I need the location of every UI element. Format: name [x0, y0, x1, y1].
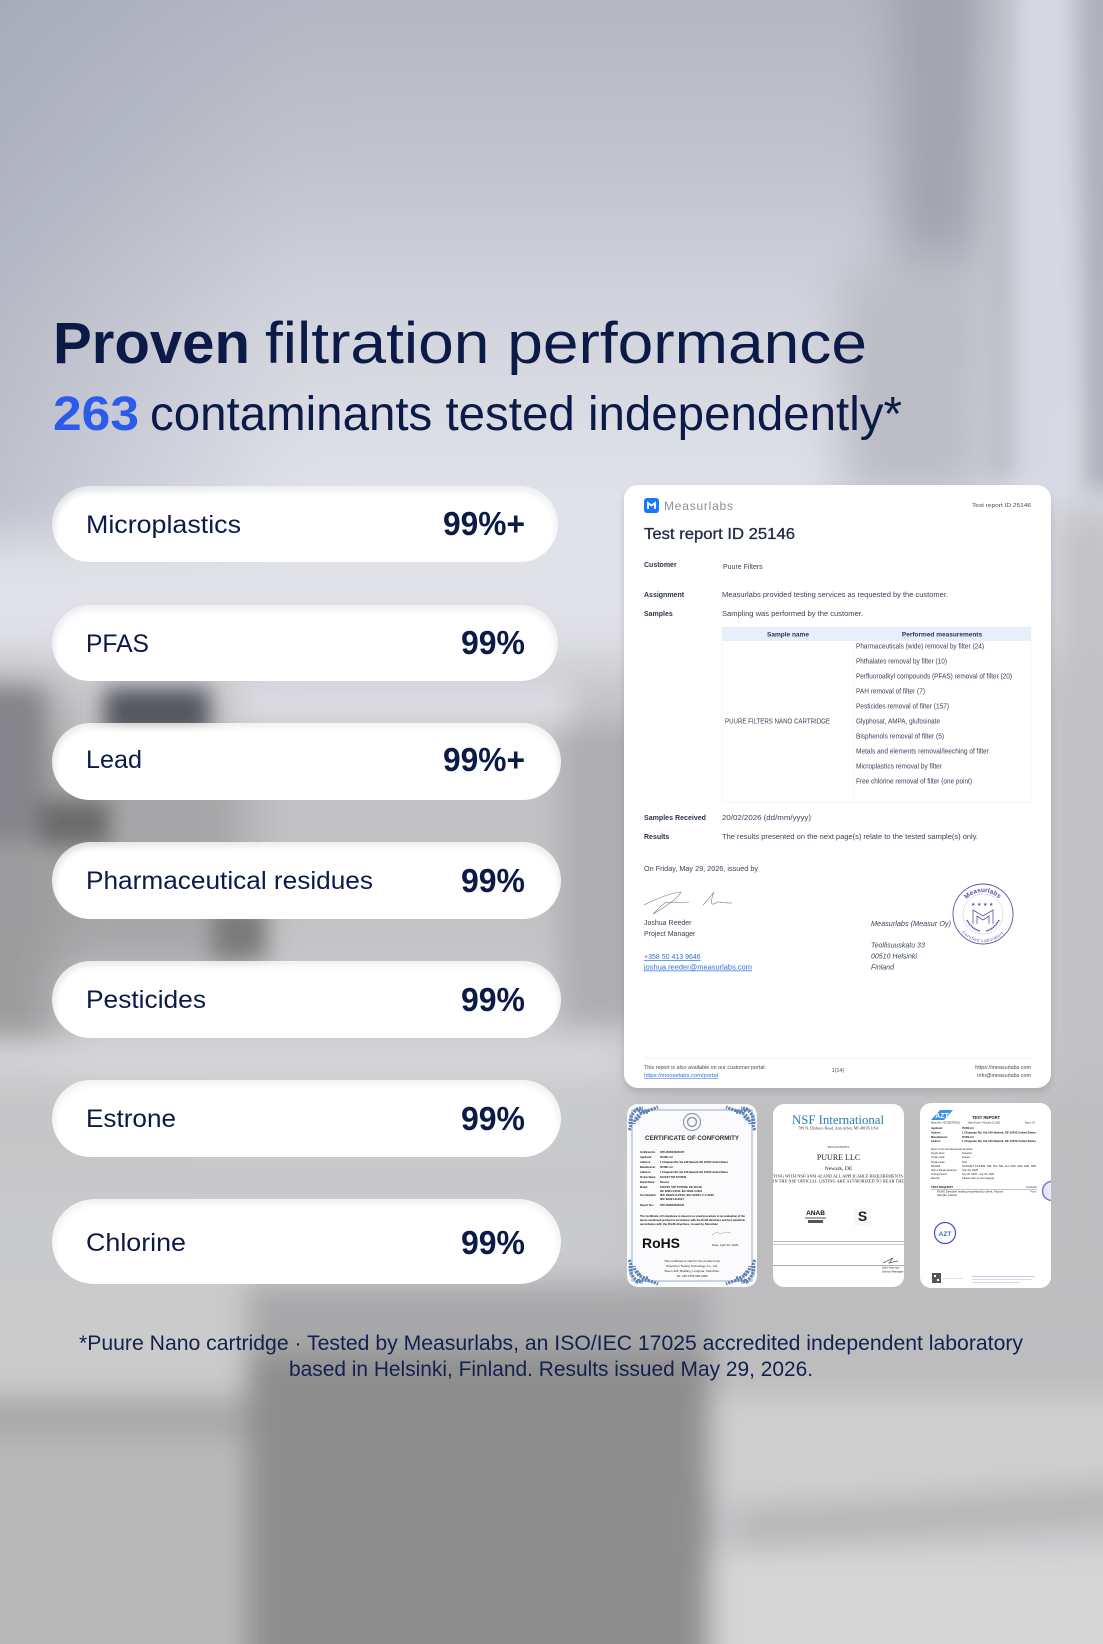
certificate text: Date: April 10, 2026	[712, 1243, 739, 1247]
report text: Date of Issue: February 03, 2025	[968, 1122, 1001, 1124]
certificate text: Room 305, Building, Longhua, Shenzhen	[665, 1269, 720, 1273]
certificate text: Model:	[640, 1185, 648, 1189]
company address: Teollisuuskatu 33	[871, 942, 925, 950]
report fields: Sampling was performed by the customer.	[722, 611, 863, 618]
icon: lab stamp	[952, 884, 1014, 944]
report fields	[644, 562, 948, 618]
signature	[644, 892, 732, 914]
report footer	[644, 1058, 1032, 1079]
pill: PFAS: PFAS	[86, 630, 149, 658]
certificate text: IEC 62321-8:2017	[660, 1197, 684, 1201]
icon: seal	[684, 1114, 700, 1130]
certificate text: Newark, DE	[825, 1166, 853, 1172]
pill: Microplastics: Microplastics	[86, 511, 241, 539]
certificate text: SPC.20260448AV78	[660, 1203, 684, 1207]
pill: Lead	[52, 723, 561, 800]
pill: Pesticides: 99%	[461, 981, 525, 1018]
report text: N/A	[962, 1160, 967, 1164]
report text: PUURE LLC	[962, 1135, 975, 1139]
samples table: Metals and elements removal/leeching of filter	[856, 748, 990, 756]
report text: Please refer to next page(s)	[962, 1176, 994, 1180]
company address	[871, 921, 951, 972]
pill: Lead: Lead	[86, 746, 142, 774]
corner ornaments	[629, 1107, 755, 1284]
pill: Estrone	[52, 1080, 561, 1157]
samples table: Performed measurements	[902, 632, 982, 638]
certificate text: 789 N. Dixboro Road, Ann Arbor, MI 48105 USA	[798, 1126, 879, 1132]
signatory contact: joshua.reeder@measurlabs.com	[643, 964, 752, 972]
icon: lab stamp: Certified Laboratory	[962, 931, 1004, 942]
report text: 1 Chapman Rd, Ste 240 Newark, DE 19702 United States	[962, 1130, 1036, 1134]
report footer: https://measurlabs.com	[975, 1065, 1032, 1071]
report text: Serial model:	[931, 1160, 945, 1164]
report fields: Assignment	[644, 592, 685, 599]
report text: Puure	[962, 1155, 970, 1159]
certificate text: Test Standard:	[640, 1193, 656, 1197]
samples table: Microplastics removal by filter	[856, 764, 943, 770]
pill: PFAS: 99%	[461, 624, 525, 661]
samples table: Glyphosat, AMPA, glufosinate	[856, 718, 940, 726]
signatory contact: Joshua Reeder	[644, 920, 692, 927]
certificate text: Tel: +86 0755 000 0000	[676, 1274, 708, 1278]
samples table	[722, 627, 1031, 802]
report text: July 29, 2025	[962, 1168, 978, 1172]
report text: Applicant:	[931, 1126, 943, 1130]
certificate text: above mentioned product in accordance with the RoHS directives and test standards	[640, 1218, 745, 1222]
samples table: Phthalates removal by filter (10)	[856, 658, 947, 666]
certificate text: YING WITH NSF/ANSI 42 AND ALL APPLICABLE REQUIREMENTS.	[773, 1174, 904, 1178]
samples table: Bisphenols removal of filter (5)	[856, 734, 944, 740]
certificate text: Certificate No.:	[640, 1150, 656, 1154]
certificate text: This certificate is valid for the product only	[664, 1259, 720, 1263]
report text: Testing Period:	[931, 1172, 947, 1176]
company address: Measurlabs (Measur Oy)	[871, 921, 951, 928]
samples table: Perfluoroalkyl compounds (PFAS) removal of filter (20)	[856, 674, 1012, 680]
report text: Report on the submitted sample as follows:	[931, 1147, 973, 1151]
icon: AZT logo: AZT	[935, 1113, 950, 1120]
fine print and signature: Kyle Norman	[882, 1266, 900, 1270]
pill: Estrone: 99%	[461, 1100, 525, 1137]
report text: 1 Chapman Rd, Ste 240 Newark, DE 19702 United States	[962, 1139, 1036, 1143]
report text: TEST REQUEST	[931, 1185, 953, 1189]
report text: Conclusion	[1026, 1185, 1037, 1189]
certificate text: IEC 62321-6:2015, IEC 62321-7-1:2015	[660, 1193, 714, 1197]
report text: Results:	[931, 1176, 940, 1180]
panel: test report document	[622, 485, 1054, 1094]
certificate text: The Certificate of Compliance is based on a small procedure to an evaluation of the	[640, 1214, 745, 1218]
title	[53, 311, 867, 376]
report footer: 1(14)	[832, 1068, 844, 1074]
certificate text: Brand Name:	[640, 1180, 655, 1184]
pill: Pharmaceutical residues	[52, 842, 561, 919]
pill: Pesticides	[52, 961, 561, 1038]
report text: Address:	[931, 1130, 941, 1134]
certificate text: IEC 62321-4:2013, IEC 62321-5:2013	[660, 1189, 702, 1193]
report footer: info@measurlabs.com	[977, 1073, 1031, 1079]
certificate text: Product Name:	[640, 1175, 656, 1179]
report text: Report No.: AZT250227BV201	[931, 1122, 961, 1124]
certificate text: PUURE LLC	[660, 1155, 674, 1159]
title: filtration performance	[265, 311, 867, 376]
report text: Page 1 of 2	[1025, 1122, 1035, 1124]
report text: Sample Name:	[931, 1151, 945, 1155]
results and issue text: The results presented on the next page(s) relate to the tested sample(s) only.	[722, 834, 978, 841]
certificate text: RECOGNIZES	[828, 1145, 849, 1149]
report fields: Samples	[644, 611, 673, 618]
report text: July 29, 2025 - July 29, 2025	[962, 1172, 994, 1176]
samples table: PAH removal of filter (7)	[856, 688, 925, 696]
certificate text: CERTIFICATE OF CONFORMITY	[645, 1135, 740, 1142]
pill: Lead: 99%+	[443, 741, 525, 778]
fine print	[943, 1276, 1035, 1283]
certificate text: Address:	[640, 1160, 651, 1164]
panel: RoHS certificate	[627, 1104, 757, 1287]
certificate text	[773, 1113, 904, 1184]
certificate text: FAUCET TAP SYSTEM	[660, 1175, 686, 1179]
report text: Model:	[931, 1164, 941, 1168]
fine print and signature	[773, 1241, 904, 1274]
icon: partial stamp	[1042, 1180, 1051, 1202]
samples table: PUURE FILTERS NANO CARTRIDGE	[725, 718, 830, 726]
samples table: Free chlorine removal of filter (one point)	[856, 778, 972, 786]
signatory contact	[643, 920, 752, 972]
report fields: Customer	[644, 562, 677, 569]
certificate text: Manufacturer:	[640, 1165, 656, 1169]
pill: Chlorine	[52, 1199, 561, 1293]
report text: PUURE LLC	[962, 1126, 975, 1130]
pill: Pesticides: Pesticides	[86, 986, 206, 1014]
signatory contact: +358 50 413 9646	[644, 954, 701, 961]
report text: Date of Sample Received:	[931, 1168, 957, 1172]
pill: PFAS	[52, 605, 558, 681]
title: Proven	[53, 311, 250, 376]
subtitle: 263	[53, 388, 139, 441]
report footer: https://mooselabs.com/portal	[644, 1073, 718, 1079]
icon: ANAB logo: ANAB	[806, 1210, 825, 1217]
icon: Measurlabs logo	[644, 498, 659, 513]
results and issue text: On Friday, May 29, 2026, issued by	[644, 866, 759, 873]
report fields: Puure Filters	[723, 564, 763, 571]
icon: round stamp: AZT	[939, 1231, 951, 1238]
certificate text: Applicant:	[640, 1155, 652, 1159]
certificate text: RoHS	[642, 1235, 680, 1251]
pill: Chlorine: Chlorine	[86, 1229, 186, 1257]
pill: Microplastics: 99%+	[443, 505, 525, 542]
report header: Test report ID 25146	[972, 503, 1031, 509]
results and issue text	[644, 815, 978, 873]
report header: Test report ID 25146	[644, 526, 795, 543]
footnote: based in Helsinki, Finland. Results issued May 29, 2026.	[289, 1357, 813, 1381]
report fields: Measurlabs provided testing services as requested by the customer.	[722, 592, 948, 599]
certificate text: Report No.:	[640, 1203, 654, 1207]
certificate text: PUURE LLC	[817, 1153, 860, 1162]
company address: Finland	[871, 964, 895, 972]
report text: Sample, Faucet	[937, 1193, 957, 1197]
pill: Chlorine: 99%	[461, 1224, 525, 1261]
report text: RoHS Directive testing requested by client, Faucet	[937, 1190, 1003, 1194]
samples table: Sample name	[767, 632, 809, 638]
icon: ANAB logo	[805, 1210, 826, 1223]
icon: AZT logo	[931, 1110, 953, 1120]
icon: QR code	[932, 1273, 941, 1283]
footnote: *Puure Nano cartridge · Tested by Measurlabs, an ISO/IEC 17025 accredited independent laboratory	[79, 1331, 1023, 1355]
icon: NSF S mark: S	[858, 1208, 867, 1224]
report header: Measurlabs	[664, 499, 733, 513]
certificate text: Shenzhen Testing Technology Co., Ltd.	[666, 1264, 718, 1268]
report footer: This report is also available on our customer portal:	[644, 1065, 766, 1071]
signatory contact: Project Manager	[644, 931, 696, 938]
pill: Pharmaceutical residues: Pharmaceutical residues	[86, 867, 373, 895]
subtitle: contaminants tested independently*	[150, 388, 902, 441]
panel: NSF International certificate	[773, 1104, 904, 1287]
report header	[644, 499, 1031, 543]
report text: Manufacturer:	[931, 1135, 948, 1139]
certificate text: IN THE NSF OFFICIAL LISTING ARE AUTHORIZED TO BEAR THE	[773, 1178, 904, 1184]
report text: Pass	[1030, 1190, 1037, 1194]
icon: lab stamp: ★★★★	[971, 902, 995, 908]
report text	[931, 1115, 1037, 1197]
results and issue text: 20/02/2026 (dd/mm/yyyy)	[722, 815, 811, 822]
certificate text: 1 Chapman Rd, Ste 240 Newark, DE 19702 United States	[660, 1160, 728, 1164]
footnote	[79, 1331, 1023, 1381]
pill: Microplastics	[52, 486, 558, 562]
fine print and signature: Senior Manager	[882, 1270, 903, 1274]
results and issue text: Samples Received	[644, 815, 706, 822]
certificate text: FAUCET TAP SYSTEM, GB, NA SE	[660, 1185, 702, 1189]
icon: round stamp	[934, 1222, 956, 1244]
results and issue text: Results	[644, 834, 669, 841]
certificate text: SPC.20260448AV78	[660, 1150, 684, 1154]
certificate text: PUURE LLC	[660, 1165, 674, 1169]
panel: AZT test report	[920, 1103, 1062, 1288]
report text: Trade mark:	[931, 1155, 945, 1159]
certificate text: Address:	[640, 1170, 651, 1174]
certificate text: 1 Chapman Rd, Ste 240 Newark, DE 19702 United States	[660, 1170, 728, 1174]
certificate text: accordance with the RoHS directives, issued by Shenzhen	[640, 1222, 718, 1226]
samples table: Pesticides removal of filter (157)	[856, 704, 949, 710]
pill: Pharmaceutical residues: 99%	[461, 862, 525, 899]
company address: 00510 Helsinki	[871, 954, 917, 960]
samples table: Pharmaceuticals (wide) removal by filter (24)	[856, 644, 984, 650]
certificate text: NSF International	[792, 1113, 885, 1127]
report text: FAUCET FILTER, GB, NA, SE, AU, 000, 000, 000, 000	[962, 1164, 1036, 1168]
report text: Address:	[931, 1139, 941, 1143]
report text: TEST REPORT	[972, 1115, 1000, 1120]
report text: Faucet	[962, 1151, 972, 1155]
certificate text: Puure	[660, 1180, 669, 1184]
certificate text	[640, 1135, 745, 1278]
pill: Estrone: Estrone	[86, 1105, 176, 1133]
icon: lab stamp: Measurlabs	[964, 888, 1000, 899]
icon: NSF S mark	[858, 1212, 867, 1221]
